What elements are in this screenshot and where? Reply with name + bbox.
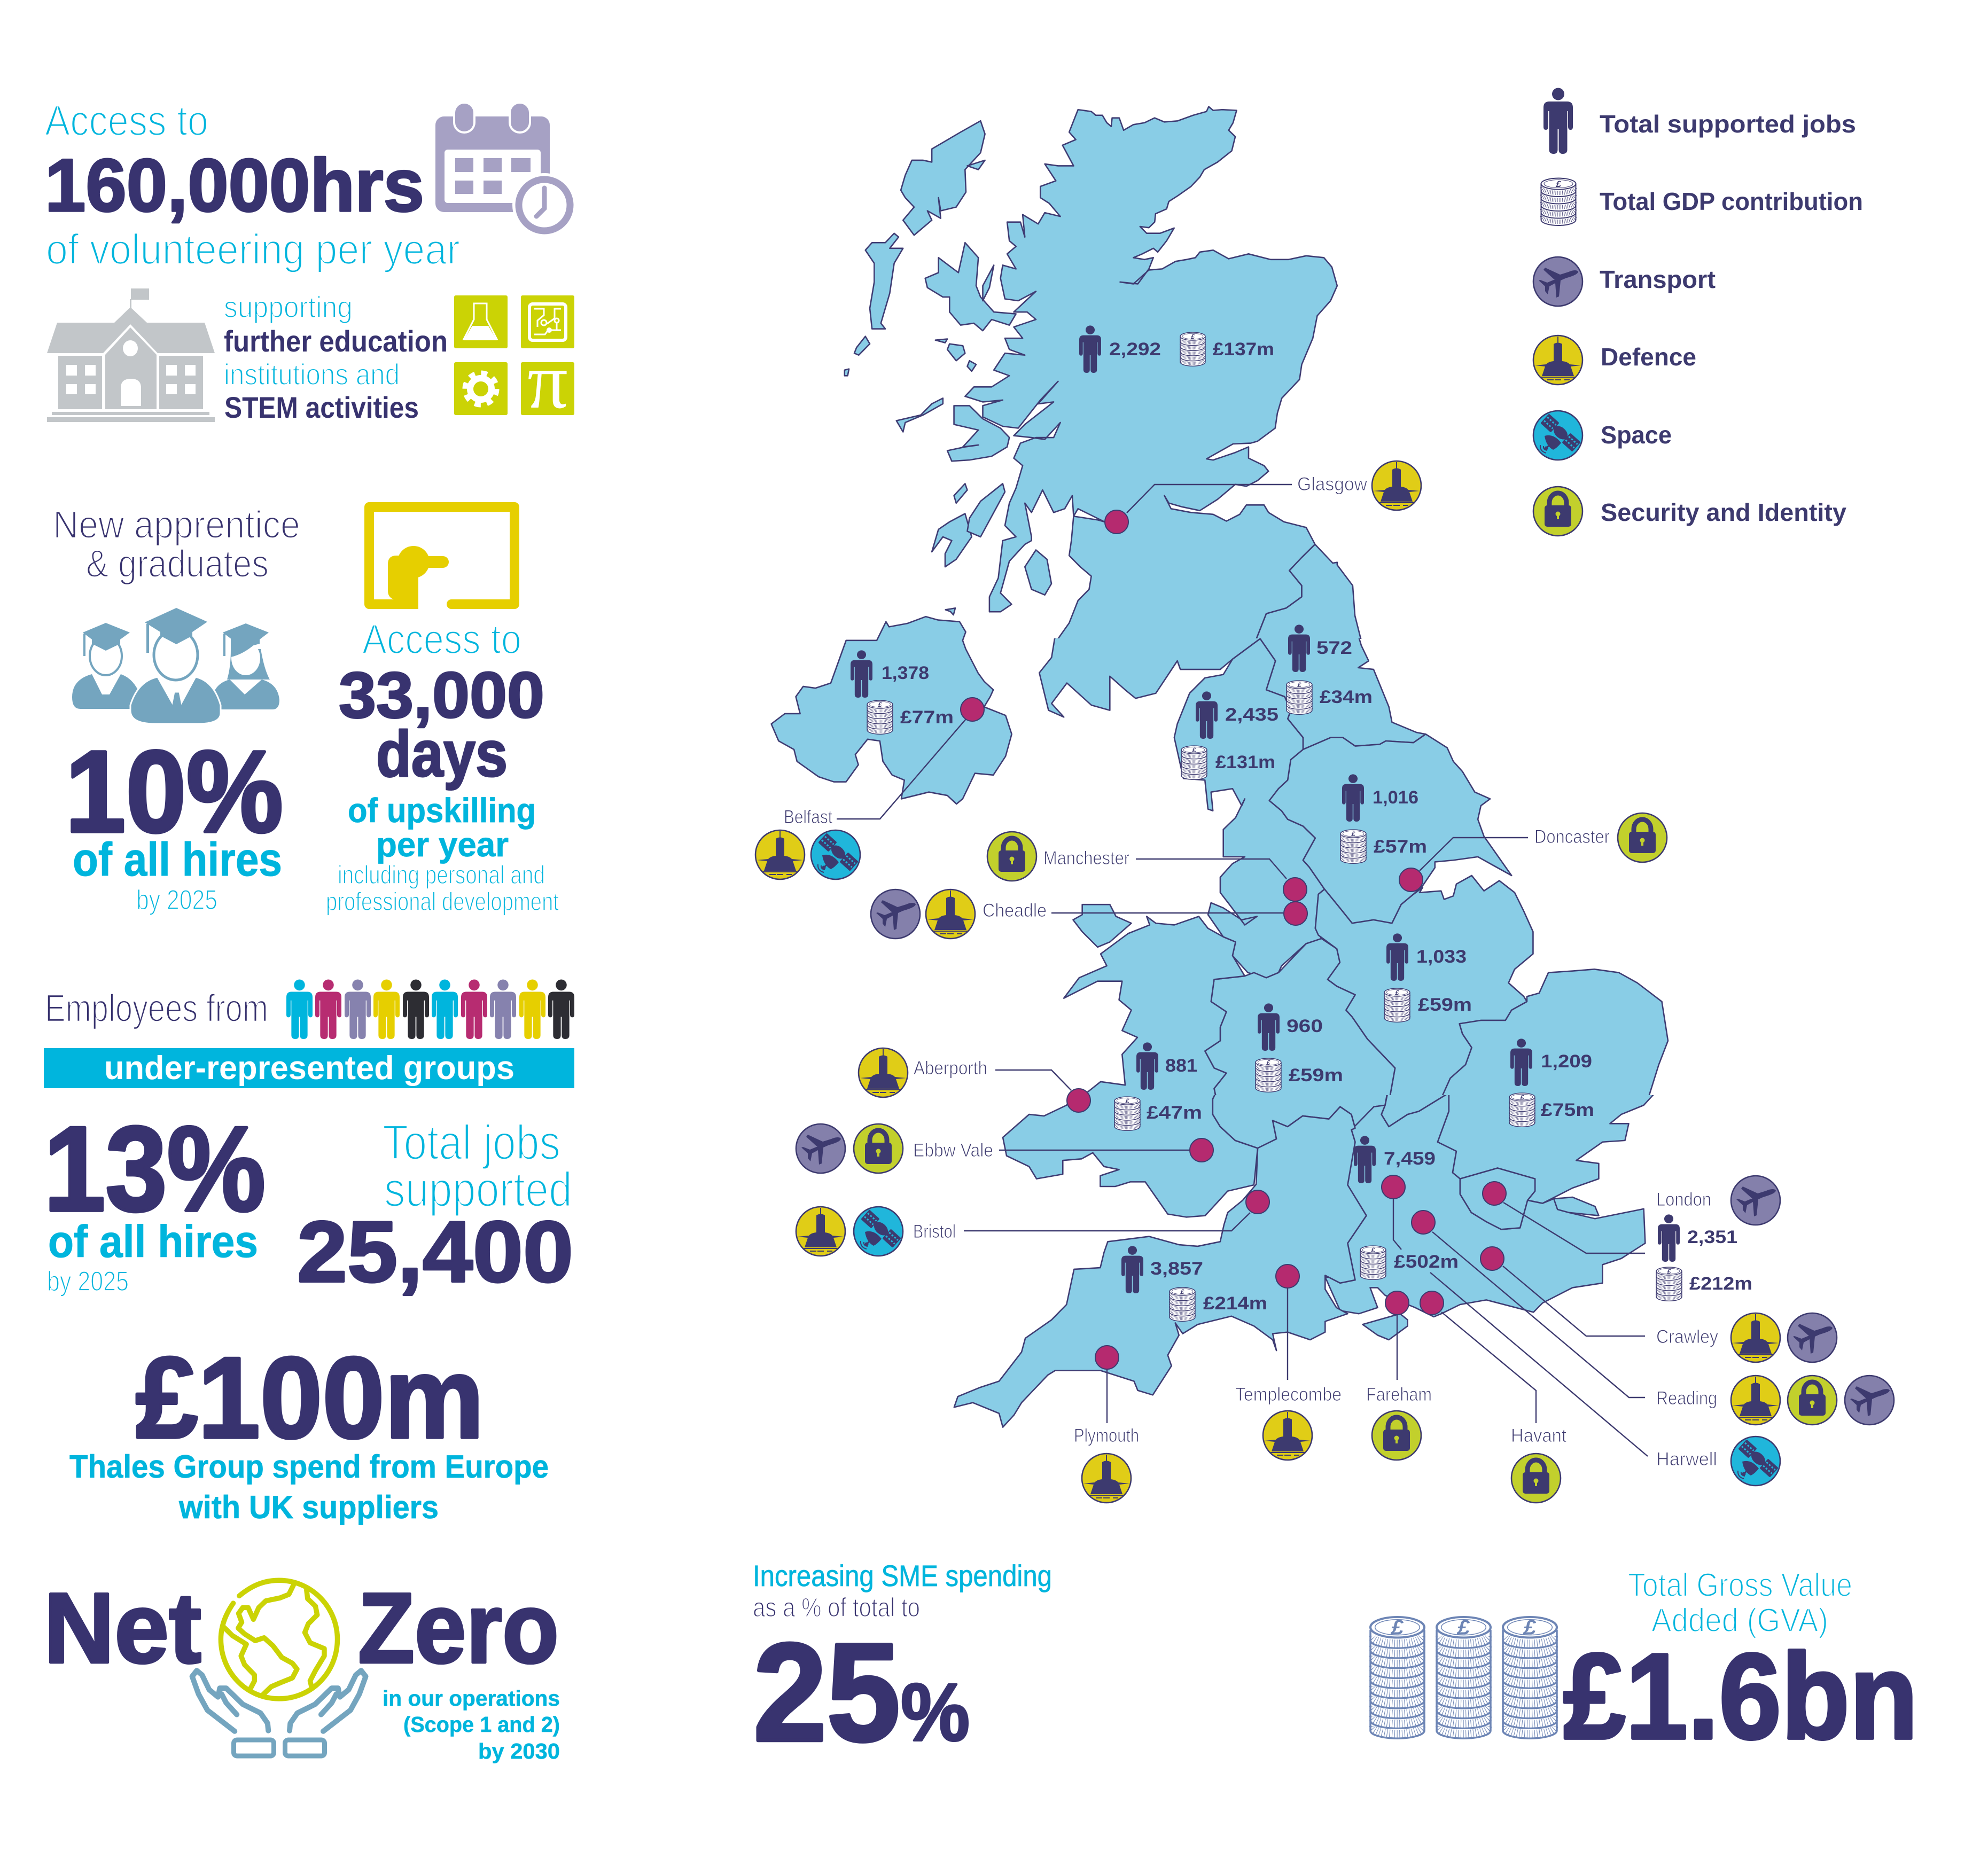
site: Fareham xyxy=(1366,1291,1432,1460)
text: of upskilling per year: per year xyxy=(376,825,509,864)
stat: 13%: 13% xyxy=(44,1101,266,1236)
text: supporting further education: STEM activities xyxy=(224,391,419,424)
stat: South West: £214m xyxy=(1203,1293,1267,1314)
text: zero: Zero xyxy=(358,1572,559,1684)
stat: 10%: 10% xyxy=(65,727,283,857)
panel: SME spending xyxy=(753,1559,1052,1770)
site: Fareham: Fareham xyxy=(1366,1384,1432,1405)
regions: middle Britain xyxy=(1039,638,1669,1095)
stat: East of England: £75m xyxy=(1541,1100,1594,1120)
site: Cheadle xyxy=(871,889,1307,939)
stat: Scotland: 2,292 xyxy=(1109,339,1161,360)
icon: row of people xyxy=(286,979,574,1039)
heading: total jobs supported xyxy=(383,1115,572,1217)
stat: Wales xyxy=(1114,1042,1202,1130)
site: Harwell: Harwell xyxy=(1656,1449,1717,1470)
text: including personal and professional development: professional development xyxy=(326,888,559,916)
site: London: £212m xyxy=(1689,1274,1752,1294)
icon: cuffs xyxy=(234,1740,325,1756)
stat: East of England xyxy=(1509,1038,1594,1127)
stat: percent sign: % xyxy=(901,1667,970,1758)
text: by 2025: by 2025 xyxy=(47,1266,129,1297)
panel: supplier spend xyxy=(69,1333,549,1525)
icon: presenter at board xyxy=(369,507,514,609)
icon: STEM pi: π xyxy=(527,337,568,425)
heading: access to: Access to xyxy=(45,97,208,144)
text: supporting further education xyxy=(224,290,448,424)
site: Crawley xyxy=(1480,1247,1837,1362)
stat: South East: £502m xyxy=(1394,1252,1459,1272)
icon: school building xyxy=(47,288,215,422)
site: Belfast: Belfast xyxy=(784,807,832,827)
site: Ebbw Vale xyxy=(796,1124,1213,1173)
site: Aberporth: Aberporth xyxy=(914,1058,987,1079)
stat: North West: 2,435 xyxy=(1225,705,1278,725)
text: of all hires: of all hires xyxy=(48,1216,258,1267)
site: Templecombe: Templecombe xyxy=(1235,1384,1342,1405)
text: by 2025: by 2025 xyxy=(136,885,217,916)
stat: Yorkshire: £57m xyxy=(1374,837,1427,857)
site: London: London xyxy=(1656,1189,1711,1210)
stat: East Midlands: 1,033 xyxy=(1416,947,1467,967)
regions: southern Britain xyxy=(954,1068,1660,1427)
panel: gross value added xyxy=(1370,1567,1918,1764)
stat: North West: £131m xyxy=(1215,752,1275,772)
icon: right hand xyxy=(290,1670,366,1731)
text: scope note xyxy=(383,1686,560,1763)
stat: 25: 25 xyxy=(753,1615,900,1770)
site: Havant: Havant xyxy=(1511,1425,1566,1446)
text: scope note: by 2030 xyxy=(478,1739,560,1763)
site: Aberporth xyxy=(859,1048,1090,1112)
text: supporting further education: further education xyxy=(224,324,448,358)
heading: new apprentice and graduates: & graduates xyxy=(86,543,269,585)
site: Cheadle: Cheadle xyxy=(983,900,1047,921)
legend item: defence xyxy=(1533,335,1696,385)
legend item: space xyxy=(1533,411,1672,460)
legend item: transport: Transport xyxy=(1600,266,1716,293)
stat: East of England: 1,209 xyxy=(1541,1051,1592,1072)
text: of upskilling per year xyxy=(348,791,536,864)
site: Crawley: Crawley xyxy=(1656,1326,1718,1347)
stat: West Midlands: £59m xyxy=(1289,1065,1343,1086)
icon: STEM circuit xyxy=(521,295,574,348)
stat: Yorkshire: 1,016 xyxy=(1373,787,1418,808)
heading: new apprentice and graduates xyxy=(53,504,300,585)
text: increasing SME spending: Increasing SME spending xyxy=(753,1559,1052,1592)
stat: Yorkshire xyxy=(1340,774,1427,863)
site: Doncaster: Doncaster xyxy=(1534,826,1610,847)
site: Glasgow xyxy=(1105,461,1421,534)
site: Glasgow: Glasgow xyxy=(1297,474,1368,495)
stat: North East: £34m xyxy=(1320,687,1373,707)
stat: Northern Ireland xyxy=(851,650,954,734)
stat: Northern Ireland: 1,378 xyxy=(882,663,929,683)
site: Plymouth xyxy=(1074,1346,1139,1503)
icon: calendar and clock xyxy=(435,103,576,237)
stat: East Midlands: £59m xyxy=(1418,995,1472,1015)
text: of all hires: of all hires xyxy=(73,833,282,886)
site: Havant xyxy=(1420,1291,1566,1503)
stat: West Midlands: 960 xyxy=(1287,1016,1323,1036)
text: of volunteering per year: of volunteering per year xyxy=(46,225,460,273)
stat: West Midlands xyxy=(1256,1003,1343,1092)
panel: upskilling xyxy=(326,507,559,916)
site: Belfast xyxy=(755,698,984,879)
site: Manchester xyxy=(987,832,1307,901)
icon: STEM flask xyxy=(454,295,508,348)
text: supporting further education: institutions and xyxy=(224,357,400,391)
heading: total jobs supported: supported xyxy=(384,1162,572,1217)
site: Harwell xyxy=(1382,1175,1780,1486)
stat: South East xyxy=(1354,1136,1459,1279)
legend item: security and identity: Security and Identity xyxy=(1601,498,1846,526)
legend item: security and identity xyxy=(1533,487,1846,536)
map: site pins xyxy=(755,461,1894,1503)
site: Doncaster xyxy=(1399,813,1667,892)
icon: globe xyxy=(221,1580,338,1699)
heading: total gross value added xyxy=(1628,1567,1852,1639)
stat: 25,400: 25,400 xyxy=(297,1204,573,1300)
stat: North West xyxy=(1181,691,1278,779)
text: including personal and professional development: including personal and xyxy=(338,861,545,889)
legend item: total GDP contribution xyxy=(1541,178,1863,225)
stat: South West: 3,857 xyxy=(1150,1259,1203,1279)
text: including personal and professional development xyxy=(326,861,559,916)
text: net: Net xyxy=(44,1572,201,1684)
text: scope note: (Scope 1 and 2) xyxy=(403,1712,560,1737)
stat: Scotland: £137m xyxy=(1213,339,1274,360)
legend item: transport xyxy=(1533,257,1716,306)
heading: employees from: Employees from xyxy=(45,987,268,1030)
banner: under-represented groups: under-represented groups xyxy=(104,1050,514,1087)
stat: £100m: £100m xyxy=(136,1333,484,1462)
panel: net zero xyxy=(44,1572,560,1763)
text: of upskilling per year: of upskilling xyxy=(348,791,536,830)
legend item: total supported jobs: Total supported jobs xyxy=(1600,110,1856,138)
text: as a percentage of total to: as a % of total to xyxy=(753,1592,920,1622)
panel: under-represented groups xyxy=(44,979,574,1300)
heading: new apprentice and graduates: New apprentice xyxy=(53,504,300,546)
heading: access to: Access to xyxy=(362,615,521,662)
map: UK regions xyxy=(771,107,1668,1427)
stat: North East: 572 xyxy=(1316,638,1352,658)
heading: total gross value added: Added (GVA) xyxy=(1651,1602,1828,1639)
icon: graduates xyxy=(72,608,279,724)
icon: coin stacks xyxy=(1370,1617,1557,1738)
text: supporting further education: supporting xyxy=(224,290,353,324)
stat: North East xyxy=(1287,624,1373,714)
text: thales group spend xyxy=(69,1449,549,1525)
site: Ebbw Vale: Ebbw Vale xyxy=(913,1140,993,1161)
site: Manchester: Manchester xyxy=(1043,848,1129,869)
stat: days: days xyxy=(376,717,508,790)
site: Bristol: Bristol xyxy=(913,1221,956,1242)
text: thales group spend: with UK suppliers xyxy=(178,1489,439,1525)
stat: 160,000hrs: 160,000hrs xyxy=(45,143,424,227)
region: Northern Ireland xyxy=(771,608,1012,804)
site: Bristol xyxy=(796,1190,1269,1256)
stat: South West xyxy=(1121,1246,1267,1321)
panel: apprentices and graduates xyxy=(53,504,300,916)
heading: total jobs supported: Total jobs xyxy=(383,1115,560,1170)
icon: left hand xyxy=(192,1670,268,1731)
stat: £1.6bn: £1.6bn xyxy=(1563,1629,1918,1764)
stat: Northern Ireland: £77m xyxy=(900,707,954,728)
stat: Scotland xyxy=(1079,325,1274,373)
map: regional stats xyxy=(851,325,1594,1321)
heading: total gross value added: Total Gross Value xyxy=(1628,1567,1852,1604)
site: Reading xyxy=(1412,1211,1894,1425)
site: Plymouth: Plymouth xyxy=(1074,1425,1139,1446)
panel: volunteering xyxy=(45,97,576,425)
legend item: defence: Defence xyxy=(1601,343,1696,371)
icon: STEM gear xyxy=(454,362,508,415)
legend item: space: Space xyxy=(1601,421,1672,449)
legend item: total supported jobs xyxy=(1543,88,1856,154)
stat: South East: 7,459 xyxy=(1384,1149,1436,1169)
legend item: total GDP contribution: Total GDP contribution xyxy=(1600,188,1863,215)
site: Templecombe xyxy=(1235,1264,1342,1460)
stat: East Midlands xyxy=(1384,933,1472,1022)
stat: 33,000: 33,000 xyxy=(339,659,544,731)
site: London: 2,351 xyxy=(1687,1227,1737,1247)
site: Reading: Reading xyxy=(1656,1388,1717,1409)
stat: Wales: 881 xyxy=(1165,1056,1197,1076)
region: Scotland north xyxy=(845,107,1361,642)
legend xyxy=(1533,88,1863,536)
text: scope note: in our operations xyxy=(383,1686,560,1711)
stat: Wales: £47m xyxy=(1147,1103,1202,1123)
text: thales group spend: Thales Group spend from Europe xyxy=(69,1449,549,1485)
site: London xyxy=(1483,1176,1780,1301)
